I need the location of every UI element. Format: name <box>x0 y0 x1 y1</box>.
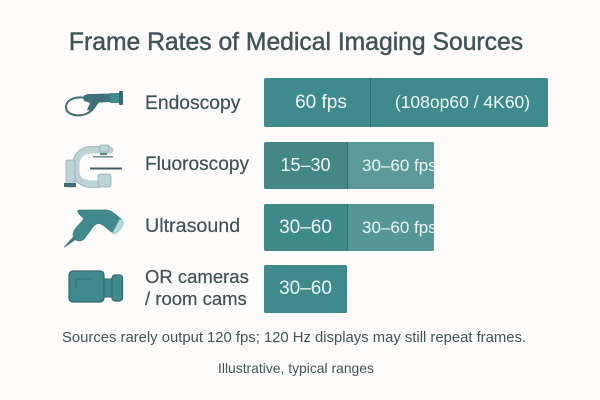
bar: Fluoroscopy <box>264 142 434 189</box>
segment: 1080p60 / 4K60: (108op60 / 4K60) <box>395 92 530 112</box>
bar: Endoscopy <box>264 78 548 127</box>
segment: 30-60: 30–60 <box>279 217 332 238</box>
segment: 30-60: 30–60 <box>279 278 332 299</box>
label: OR cameras / room cams: OR cameras <box>145 266 249 287</box>
bar: OR cameras <box>264 265 347 313</box>
label: OR cameras / room cams <box>144 266 249 308</box>
segment: 60 fps <box>264 78 371 127</box>
segment: 15-30: 15–30 <box>280 155 331 175</box>
label: OR cameras / room cams: / room cams <box>145 288 247 308</box>
segment: 1080p60 / 4K60 <box>371 78 548 127</box>
segment: 30-60 <box>264 204 348 251</box>
label: Endoscopy: Endoscopy <box>145 93 240 114</box>
label: Fluoroscopy: Fluoroscopy <box>145 154 249 175</box>
caption: Illustrative, typical ranges <box>218 360 374 376</box>
footnote: Sources rarely output 120 fps; 120 Hz displays may still repeat frames. <box>62 330 526 346</box>
bar: Ultrasound <box>264 204 434 251</box>
segment: 60 fps: 60 fps <box>295 92 347 113</box>
segment: 30-60 <box>264 265 347 313</box>
icon: ultrasound probe <box>64 210 124 248</box>
icon: fluoroscopy C-arm <box>64 144 122 188</box>
title: Frame Rates of Medical Imaging Sources <box>69 29 523 56</box>
icon: endoscope <box>65 91 123 116</box>
icon: video camera <box>68 270 124 303</box>
label: Ultrasound: Ultrasound <box>145 215 240 237</box>
segment: 30-60 fps <box>348 142 434 189</box>
segment: 15-30 <box>264 142 348 189</box>
segment: 30-60 fps <box>348 204 434 251</box>
